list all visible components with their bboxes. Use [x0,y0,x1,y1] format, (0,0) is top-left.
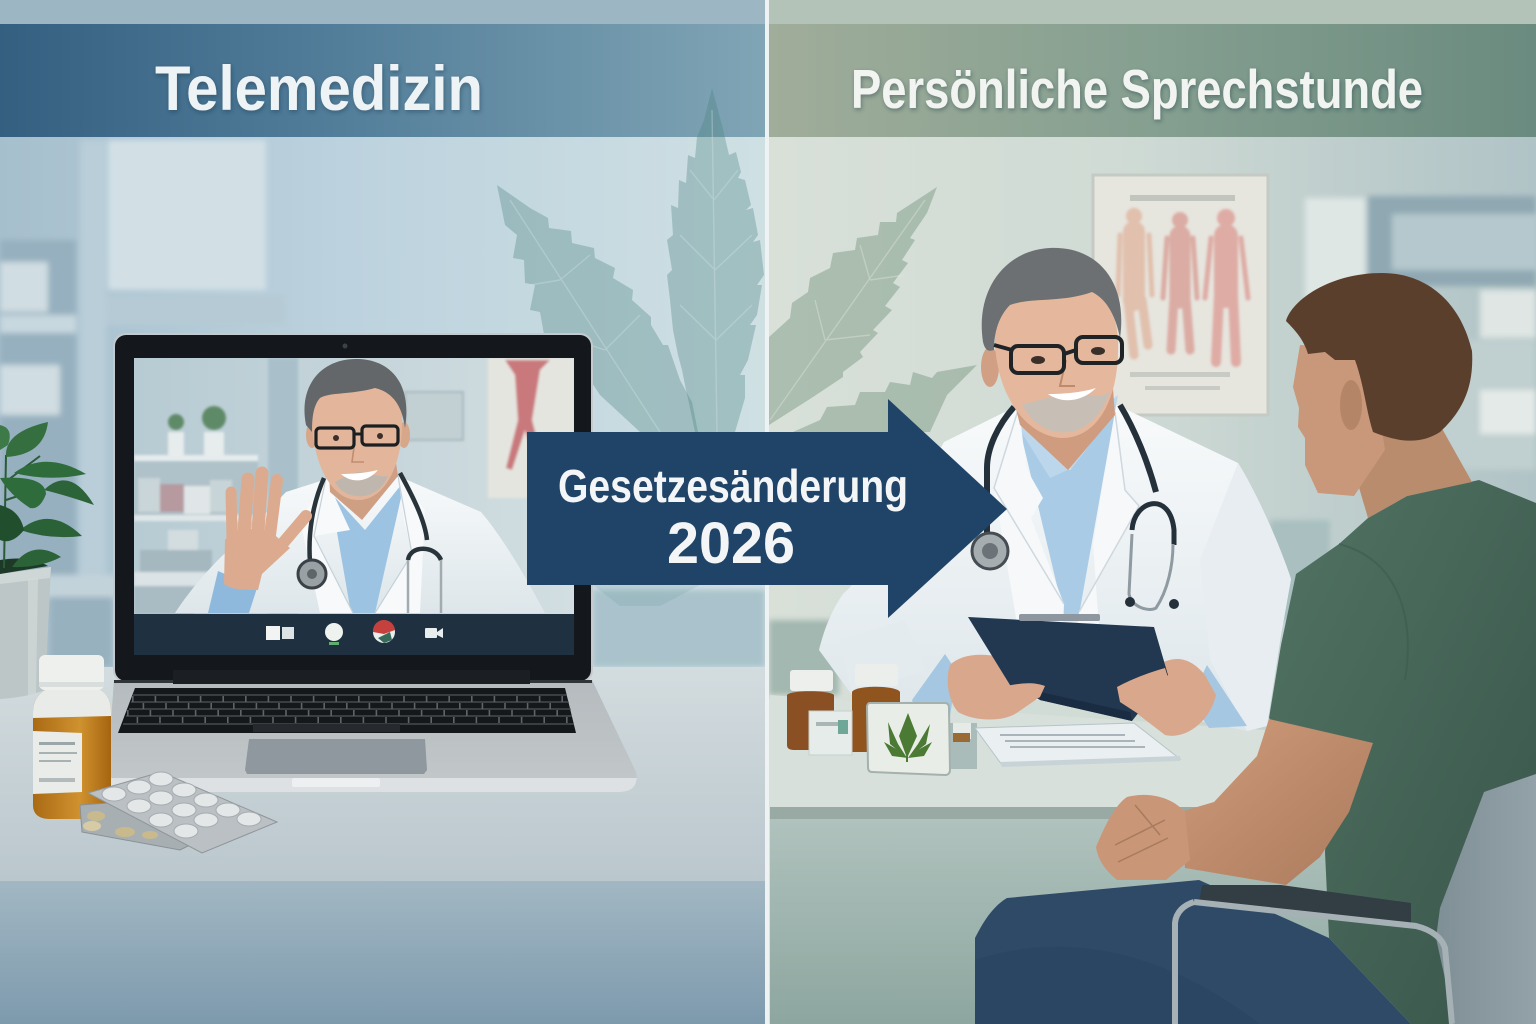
clasped hands [1096,795,1190,880]
arrow label: Gesetzesänderung [558,460,908,512]
trackpad [245,739,427,774]
stethoscope on screen [310,473,427,562]
keyboard [118,688,576,733]
panel: right title band [769,24,1536,137]
video call toolbar [134,614,574,655]
icon: amber pill bottle [33,655,111,819]
arm [1180,719,1373,885]
waving hand [208,571,257,613]
laptop lid [113,333,593,683]
icon: papers on desk [975,723,1180,767]
icon: cannabis leaf watermark left [497,88,764,606]
hand fingers over clipboard [998,683,1045,712]
heading: Persönliche Sprechstunde: Persönliche Sprechstunde [851,58,1423,120]
arrow: Gesetzesänderung 2026 [527,399,1007,618]
stethoscope [987,407,1014,536]
icon: patient seen from behind [975,273,1536,1024]
neck and head [1010,375,1115,470]
arrow: Gesetzesänderung 2026: 2026 [667,511,795,576]
icon: blister pack [80,772,277,853]
lapels [994,407,1064,700]
doctor on screen [175,359,545,613]
white coat [819,405,1291,731]
icon: cannabis leaf card [867,703,977,775]
panel: left title band [0,24,766,137]
divider line [765,0,769,1024]
icon: potted plant [0,422,94,699]
shirt cuffs [912,654,957,716]
icon: medicine bottles on desk [787,664,900,755]
green shirt [1269,480,1536,1024]
laptop screen [134,358,574,655]
neck and face [1345,425,1472,518]
panel: right wall poster [1093,175,1268,415]
glasses [994,337,1122,373]
panel: right desk [770,695,1330,1024]
icon: in-person doctor [819,248,1291,736]
blue shirt [1020,412,1115,615]
panel: left desk [0,667,765,1024]
laptop base [107,680,637,792]
icon: laptop with video call [107,333,637,792]
panel: left background Telemedizin [0,0,766,1024]
icon: cannabis leaf watermark right [769,187,977,432]
heading: Telemedizin: Telemedizin [155,54,483,124]
neck and head [330,464,398,520]
icon: clipboard [968,614,1175,721]
icon: office chair [1175,774,1536,1024]
hair [1286,273,1472,441]
hands [948,655,1045,720]
jeans [975,880,1411,1024]
panel: right background Persönliche Sprechstunde [769,0,1536,1024]
